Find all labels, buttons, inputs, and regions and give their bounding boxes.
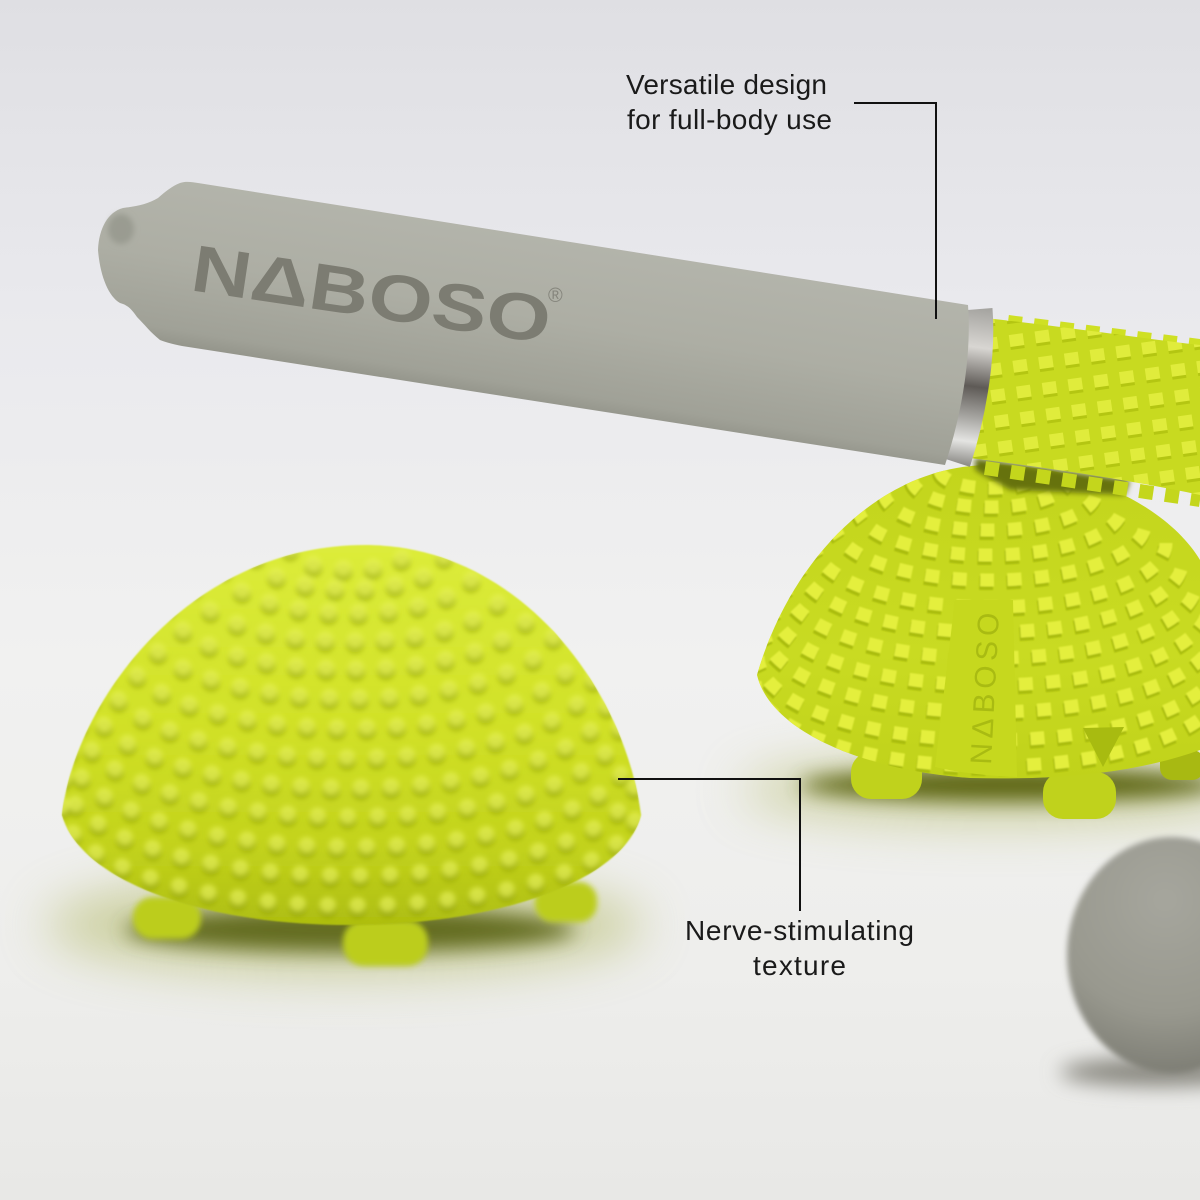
callout leader line xyxy=(854,103,936,319)
nipple dimple xyxy=(108,214,134,244)
callout leader line xyxy=(618,779,800,911)
left dome massage ball xyxy=(45,545,645,975)
grey ball body xyxy=(1067,837,1200,1073)
grey ball shadow xyxy=(1060,1058,1200,1086)
callout text: texture xyxy=(753,950,846,981)
left dome contact shadow xyxy=(125,908,575,952)
right dome feet xyxy=(851,750,1200,819)
callout text xyxy=(685,915,914,981)
right dome logo strip xyxy=(935,600,1017,777)
handle body xyxy=(970,318,1200,495)
left dome feet xyxy=(133,882,597,966)
callout: nerve-stimulating texture xyxy=(618,779,914,981)
handle spike rows xyxy=(985,322,1200,500)
registered mark: ® xyxy=(548,285,563,307)
metal ring xyxy=(958,309,981,463)
right dome massage ball xyxy=(740,465,1200,822)
right dome triangle mark xyxy=(1083,727,1124,767)
brand wordmark: NΔBOSO xyxy=(187,231,556,357)
callout text: for full-body use xyxy=(627,104,832,135)
right dome contact shadow xyxy=(800,769,1200,801)
textured handle xyxy=(970,318,1200,500)
right dome logo text: NΔBOSO xyxy=(965,612,1006,765)
left dome soft shadow xyxy=(45,875,645,975)
right dome soft shadow xyxy=(740,758,1200,822)
right dome body xyxy=(757,465,1200,778)
callout text: Versatile design xyxy=(626,69,827,100)
callout: versatile design xyxy=(626,69,936,319)
grey handle body xyxy=(98,182,969,465)
grey ball xyxy=(1060,837,1200,1086)
callout text xyxy=(626,69,832,135)
gap shadow under handle xyxy=(975,458,1130,495)
right dome texture xyxy=(754,470,1200,769)
left dome texture xyxy=(62,547,638,910)
massage stick xyxy=(98,182,1200,500)
callout text: Nerve-stimulating xyxy=(685,915,914,946)
left dome body xyxy=(62,545,641,925)
